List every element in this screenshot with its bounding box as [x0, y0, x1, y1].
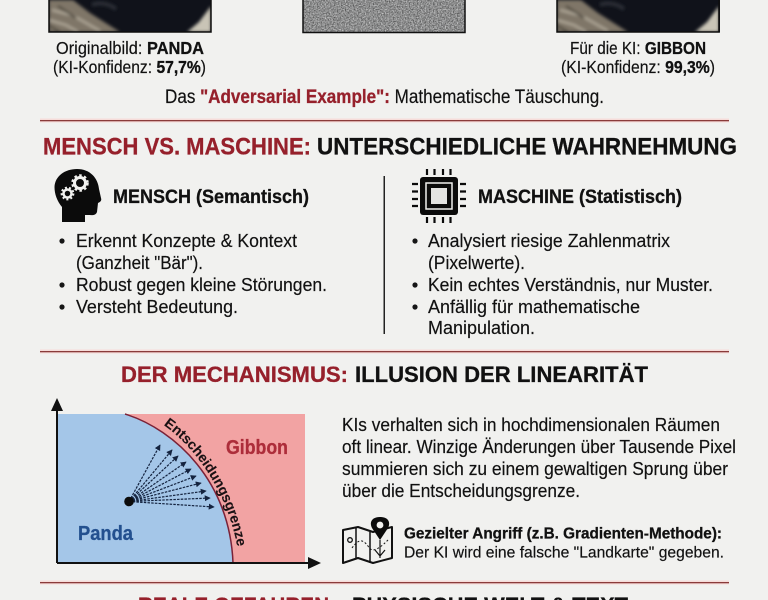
text block: linearity explanation [342, 414, 736, 501]
panel: Mensch [54, 169, 327, 317]
arrows: perturbation vectors [129, 445, 214, 507]
heading: Mensch vs. Maschine: UNTERSCHIEDLICHE WAHRNEHMUNG [317, 134, 737, 160]
list: Maschine bullets [412, 230, 713, 338]
text block: linearity explanation: oft linear. Winzige Änderungen über Tausende Pixel [342, 436, 736, 457]
image: original panda photo [48, 0, 212, 32]
callout: targeted attack [404, 526, 724, 562]
list: Mensch bullets: Robust gegen kleine Störungen. [76, 274, 327, 295]
image: adversarial noise [303, 0, 465, 33]
caption: manipulated image: (KI-Konfidenz: 99,3%) [561, 57, 715, 77]
label: Panda: Panda [78, 523, 134, 545]
list: Mensch bullets: Erkennt Konzepte & Kontext [76, 230, 297, 251]
subheading: Mensch: MENSCH (Semantisch) [113, 187, 309, 208]
list: Maschine bullets: Anfällig für mathematische [428, 296, 640, 317]
list: Mensch bullets: (Ganzheit "Bär"). [76, 252, 203, 273]
heading: Der Mechanismus: DER MECHANISMUS: [121, 362, 348, 387]
text block: linearity explanation: KIs verhalten sich in hochdimensionalen Räumen [342, 414, 720, 435]
icon: head with gears [54, 169, 101, 222]
list: Mensch bullets: Versteht Bedeutung. [76, 296, 238, 317]
region: Panda [58, 414, 233, 563]
caption: original image: (KI-Konfidenz: 57,7%) [53, 57, 206, 77]
image: manipulated panda photo [557, 0, 720, 32]
heading: Der Mechanismus [121, 362, 649, 387]
heading: Der Mechanismus: ILLUSION DER LINEARITÄT [355, 362, 649, 387]
caption: manipulated image: Für die KI: GIBBON [570, 38, 706, 58]
text block: linearity explanation: summieren sich zu einem gewaltigen Sprung über [342, 458, 728, 479]
chart: decision boundary [51, 398, 321, 569]
list: Maschine bullets: (Pixelwerte). [428, 252, 525, 273]
text block: linearity explanation: über die Entscheidungsgrenze. [342, 480, 580, 501]
callout: targeted attack: Gezielter Angriff (z.B. Gradienten-Methode): [404, 526, 722, 542]
list: Maschine bullets: Kein echtes Verständnis, nur Muster. [428, 274, 713, 295]
list: Mensch bullets [59, 230, 327, 317]
label: Gibbon: Gibbon [226, 437, 288, 459]
list: Maschine bullets: Analysiert riesige Zahlenmatrix [428, 230, 671, 251]
subheading: Maschine: MASCHINE (Statistisch) [478, 187, 682, 208]
callout: targeted attack: Der KI wird eine falsche "Landkarte" gegeben. [404, 544, 724, 562]
icon: map with pin [343, 517, 392, 563]
panel: Maschine [412, 169, 713, 338]
icon: microchip [412, 169, 466, 223]
heading: Mensch vs. Maschine [43, 134, 737, 160]
label: Entscheidungsgrenze: Entscheidungsgrenze [164, 418, 244, 546]
heading: Reale Gefahren [138, 593, 629, 600]
dot: starting point [124, 497, 134, 506]
caption: manipulated image [561, 38, 715, 77]
caption: original image [53, 38, 206, 77]
caption: adversarial example: Das "Adversarial Example": Mathematische Täuschung. [165, 87, 604, 108]
list: Maschine bullets: Manipulation. [428, 317, 535, 338]
caption: original image: Originalbild: PANDA [56, 38, 204, 58]
axes [51, 398, 321, 569]
heading: Mensch vs. Maschine: MENSCH VS. MASCHINE: [43, 134, 311, 160]
